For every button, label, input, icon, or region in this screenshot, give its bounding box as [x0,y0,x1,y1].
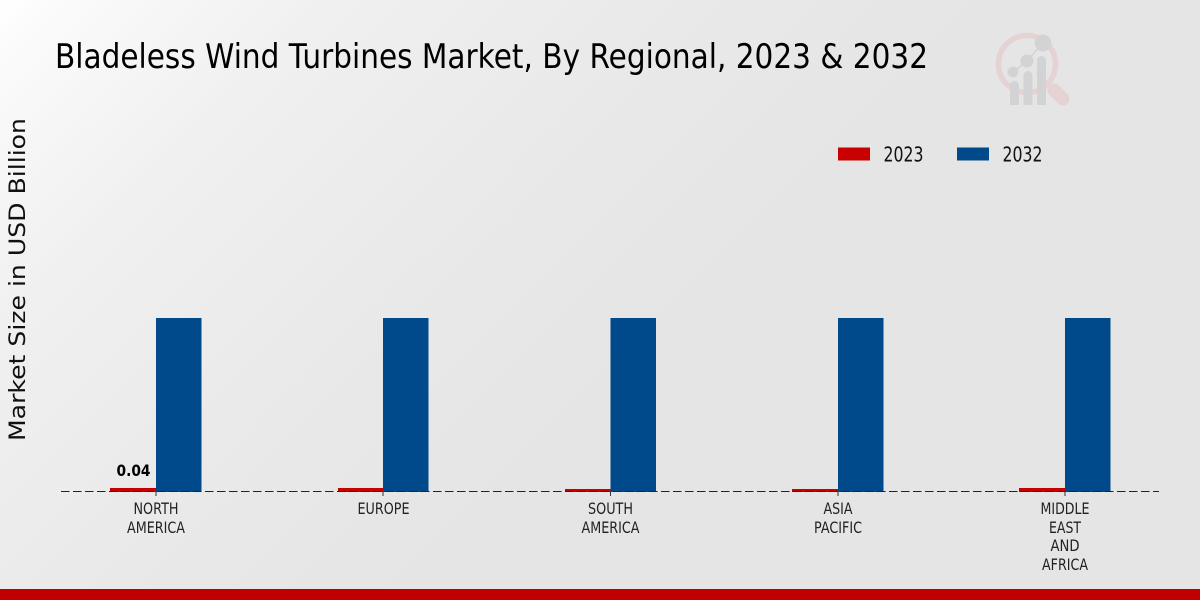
y axis title: Market Size in USD Billion [6,118,31,441]
label: North America: NORTH [134,499,178,518]
label: Middle East and Africa: MIDDLE [1040,499,1090,518]
legend item: 2032 [957,142,1042,166]
bar chart [61,318,1159,496]
tick marks [156,492,1065,496]
label: North America: AMERICA [127,518,185,537]
label: South America: AMERICA [582,518,640,537]
legend [838,142,1042,166]
value label: 0.04 [116,461,150,480]
x axis labels [127,499,1090,574]
label: Middle East and Africa [1040,499,1090,574]
legend item: 2023: 2023 [884,142,924,166]
legend item: 2032: 2032 [1002,142,1042,166]
legend item: 2023 [838,142,924,166]
label: Asia Pacific: PACIFIC [814,518,862,537]
group: South America [565,318,656,492]
label: Middle East and Africa: EAST [1049,518,1081,537]
group: Middle East and Africa [1019,318,1110,492]
icon: watermark logo [998,34,1063,105]
title: Bladeless Wind Turbines Market, By Regional, 2023 & 2032 [55,37,928,77]
label: South America: SOUTH [588,499,633,518]
label: Middle East and Africa: AND [1050,536,1080,555]
label: Middle East and Africa: AFRICA [1042,555,1088,574]
baseline [61,490,1159,492]
group: Asia Pacific [792,318,884,492]
label: Asia Pacific: ASIA [824,499,853,518]
footer bar [0,589,1200,600]
label: South America [582,499,640,537]
label: Asia Pacific [814,499,862,537]
group: Europe [338,318,428,492]
label: Europe: EUROPE [358,499,410,518]
label: North America [127,499,185,537]
group: North America [110,318,202,492]
